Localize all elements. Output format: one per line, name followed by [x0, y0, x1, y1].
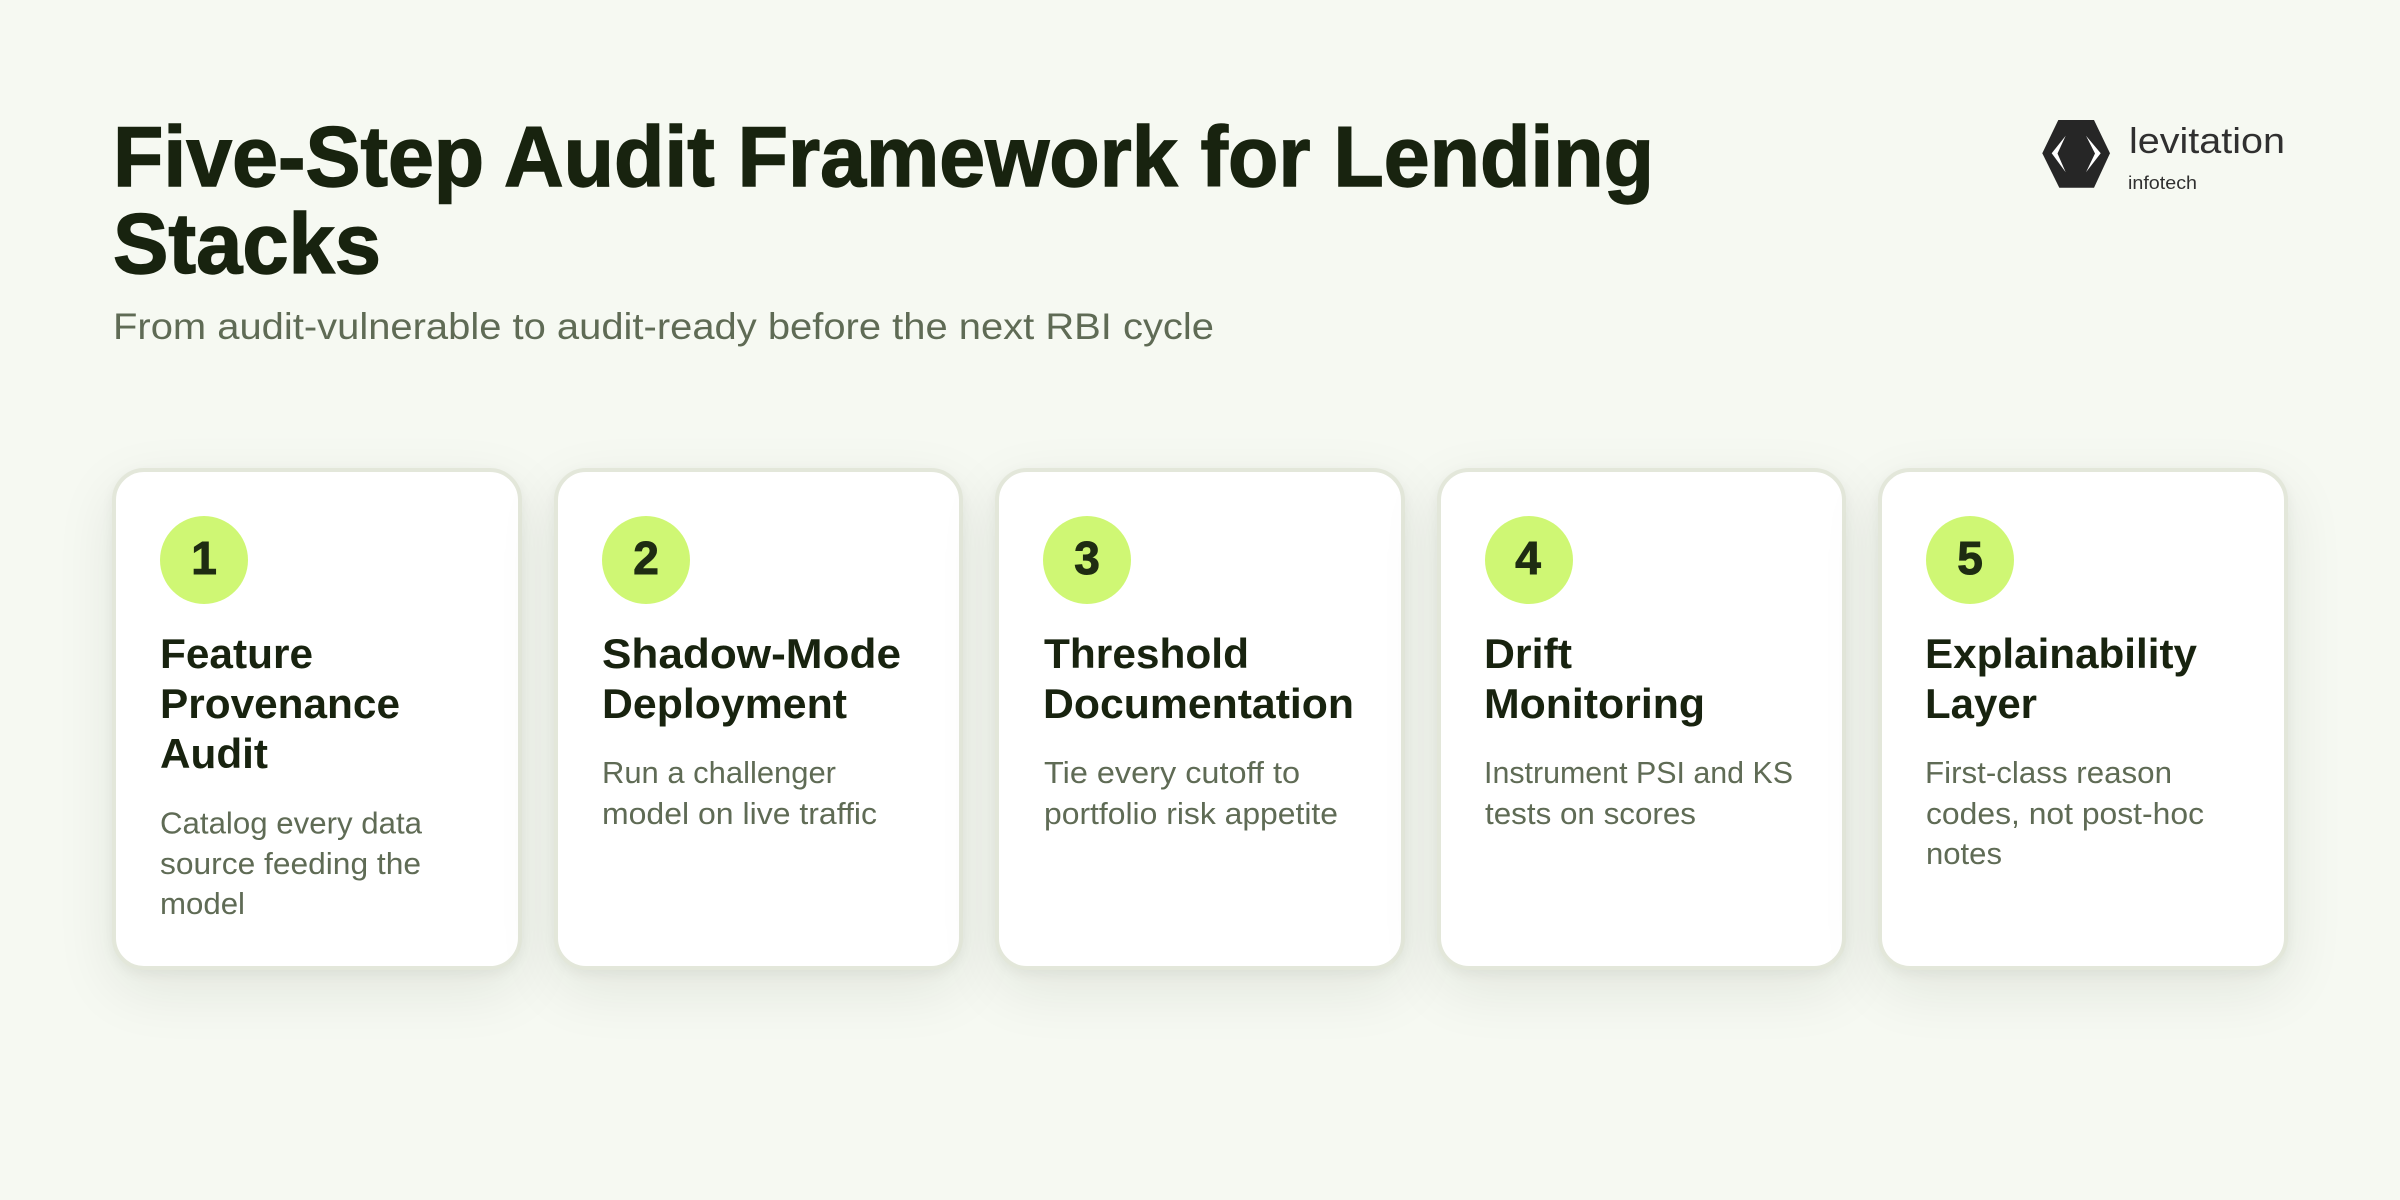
step 4 heading: Monitoring: [1484, 680, 1705, 727]
step number badge 1: 1: [191, 532, 217, 584]
step 2 description: Run a challenger: [602, 755, 836, 790]
panel: step 4: [1437, 468, 1846, 970]
logo wordmark: levitation: [2129, 120, 2285, 161]
step 4 description: Instrument PSI and KS: [1484, 755, 1793, 790]
step 3 heading: Threshold: [1044, 630, 1249, 677]
step number badge 4: 4: [1515, 532, 1541, 584]
step 1 description: model: [160, 886, 245, 921]
step number badge 5: 5: [1958, 532, 1983, 584]
step 4 heading: Drift: [1484, 630, 1572, 677]
step 3 description: [1044, 755, 1338, 831]
step number badge 4: [1485, 516, 1573, 604]
step 4 description: [1484, 755, 1793, 831]
step 2 description: model on live traffic: [602, 796, 877, 831]
step 5 description: notes: [1926, 836, 2002, 871]
step 5 description: codes, not post-hoc: [1926, 796, 2204, 831]
icon: hexagon code mark: [2042, 120, 2110, 188]
title: Five-Step Audit Framework for Lending: [113, 110, 1654, 205]
step number badge 2: 2: [633, 532, 658, 584]
panel: step 5: [1878, 468, 2288, 970]
step 5 heading: Layer: [1925, 680, 2037, 727]
step 3 heading: Documentation: [1043, 680, 1354, 727]
panel: step 2: [554, 468, 963, 970]
step 1 heading: Audit: [160, 730, 268, 777]
title: [113, 110, 1654, 292]
step 5 description: [1925, 755, 2204, 871]
step 1 description: source feeding the: [160, 846, 421, 881]
logo: levitation infotech: [2042, 120, 2285, 193]
step 5 heading: [1925, 630, 2198, 727]
step number badge 2: [602, 516, 690, 604]
step 4 description: tests on scores: [1485, 796, 1696, 831]
step 2 heading: Shadow-Mode: [602, 630, 901, 677]
panel: step 3: [995, 468, 1405, 970]
step number badge 5: [1926, 516, 2014, 604]
step 5 heading: Explainability: [1925, 630, 2198, 677]
step 1 heading: [160, 630, 400, 777]
step 5 description: First-class reason: [1925, 755, 2172, 790]
title: Stacks: [113, 197, 381, 292]
step number badge 1: [160, 516, 248, 604]
step 1 heading: Provenance: [160, 680, 400, 727]
step 3 description: portfolio risk appetite: [1044, 796, 1338, 831]
step number badge 3: 3: [1074, 532, 1100, 584]
logo wordmark: infotech: [2128, 173, 2197, 193]
step 2 heading: Deployment: [602, 680, 847, 727]
step 1 heading: Feature: [160, 630, 313, 677]
step 1 description: Catalog every data: [160, 806, 423, 840]
step 2 description: [602, 755, 877, 831]
step 3 heading: [1043, 630, 1354, 727]
step 3 description: Tie every cutoff to: [1044, 755, 1300, 790]
step 1 description: [160, 806, 423, 921]
step number badge 3: [1043, 516, 1131, 604]
step 4 heading: [1484, 630, 1705, 727]
logo wordmark: [2128, 120, 2285, 193]
subtitle: From audit-vulnerable to audit-ready before the next RBI cycle: [113, 306, 1214, 347]
panel: step 1: [112, 468, 522, 970]
step 2 heading: [602, 630, 901, 727]
